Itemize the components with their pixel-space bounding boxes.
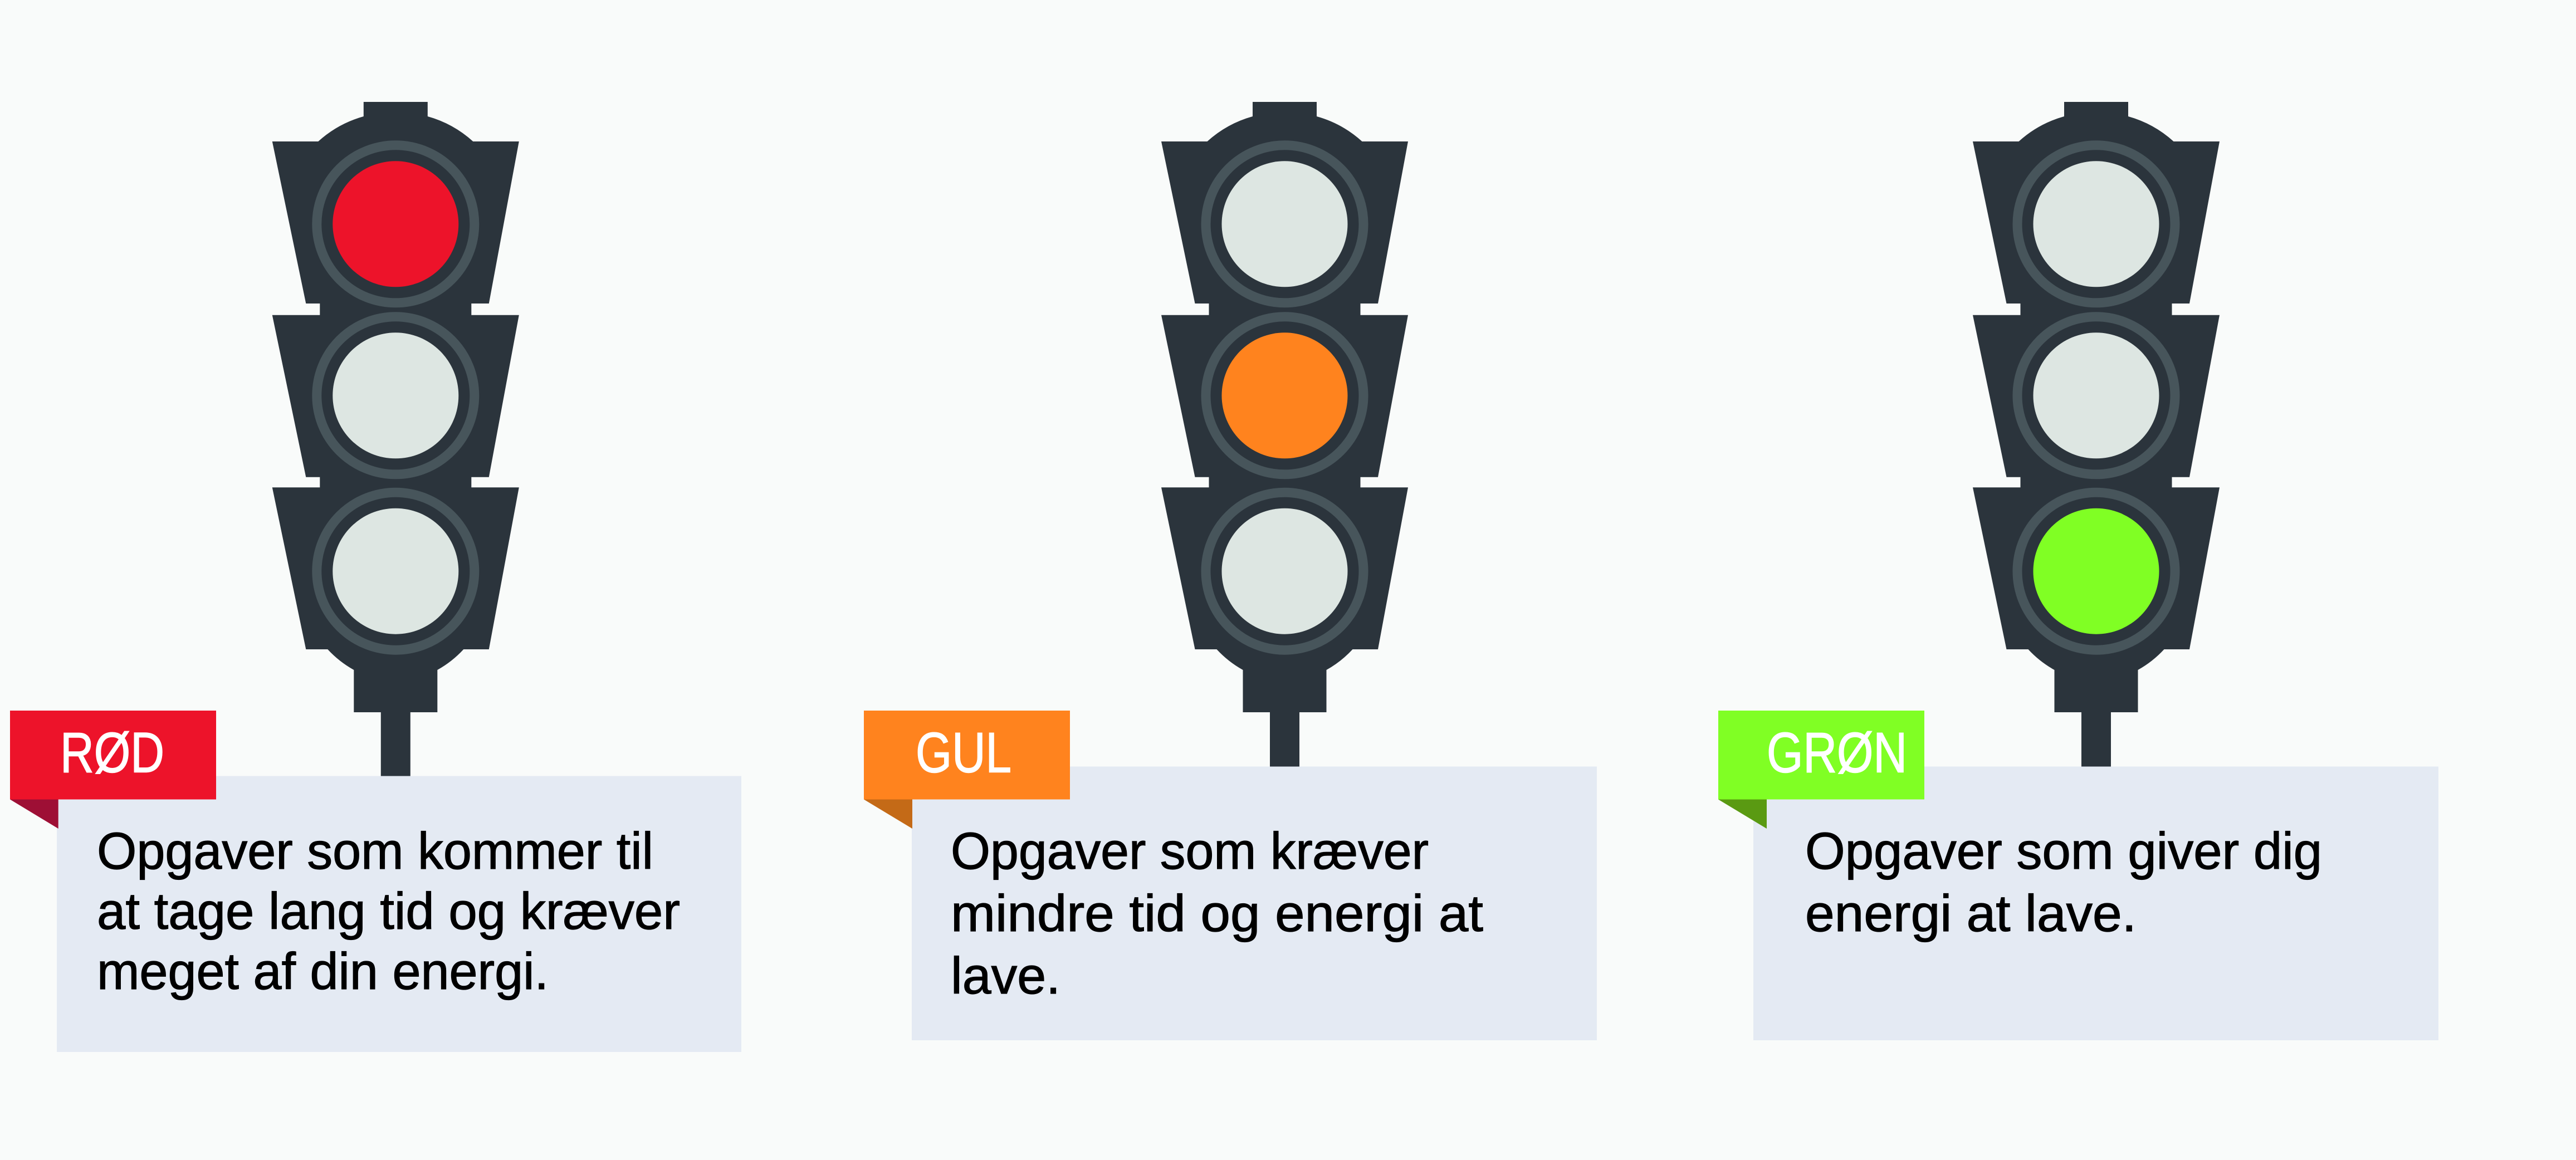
icon: orange traffic light bbox=[1161, 102, 1408, 767]
description box: rød: at tage lang tid og kræver bbox=[97, 882, 680, 940]
panel: grøn traffic light column bbox=[1718, 102, 2438, 1040]
description box: grøn: Opgaver som giver dig bbox=[1805, 822, 2322, 880]
description box: rød: meget af din energi. bbox=[97, 942, 549, 1000]
label tag: GRØN bbox=[1718, 711, 1924, 829]
description box: rød: Opgaver som kommer til bbox=[97, 822, 653, 880]
label tag: GUL: GUL bbox=[916, 721, 1011, 785]
description box: gul bbox=[912, 766, 1597, 1040]
label tag: RØD bbox=[10, 711, 216, 829]
icon: green traffic light bbox=[1973, 102, 2220, 767]
label tag: RØD: RØD bbox=[60, 721, 164, 785]
description box: grøn bbox=[1753, 766, 2438, 1040]
description box: grøn: energi at lave. bbox=[1805, 884, 2137, 942]
description box: gul: mindre tid og energi at bbox=[951, 884, 1483, 942]
description box: gul: lave. bbox=[951, 947, 1060, 1005]
panel: gul traffic light column bbox=[864, 102, 1597, 1040]
icon: red traffic light bbox=[272, 102, 519, 776]
panel: rød traffic light column bbox=[10, 102, 741, 1052]
label tag: GUL bbox=[864, 711, 1070, 829]
description box: gul: Opgaver som kræver bbox=[951, 822, 1429, 880]
description box: rød bbox=[57, 776, 741, 1052]
label tag: GRØN: GRØN bbox=[1767, 721, 1907, 785]
